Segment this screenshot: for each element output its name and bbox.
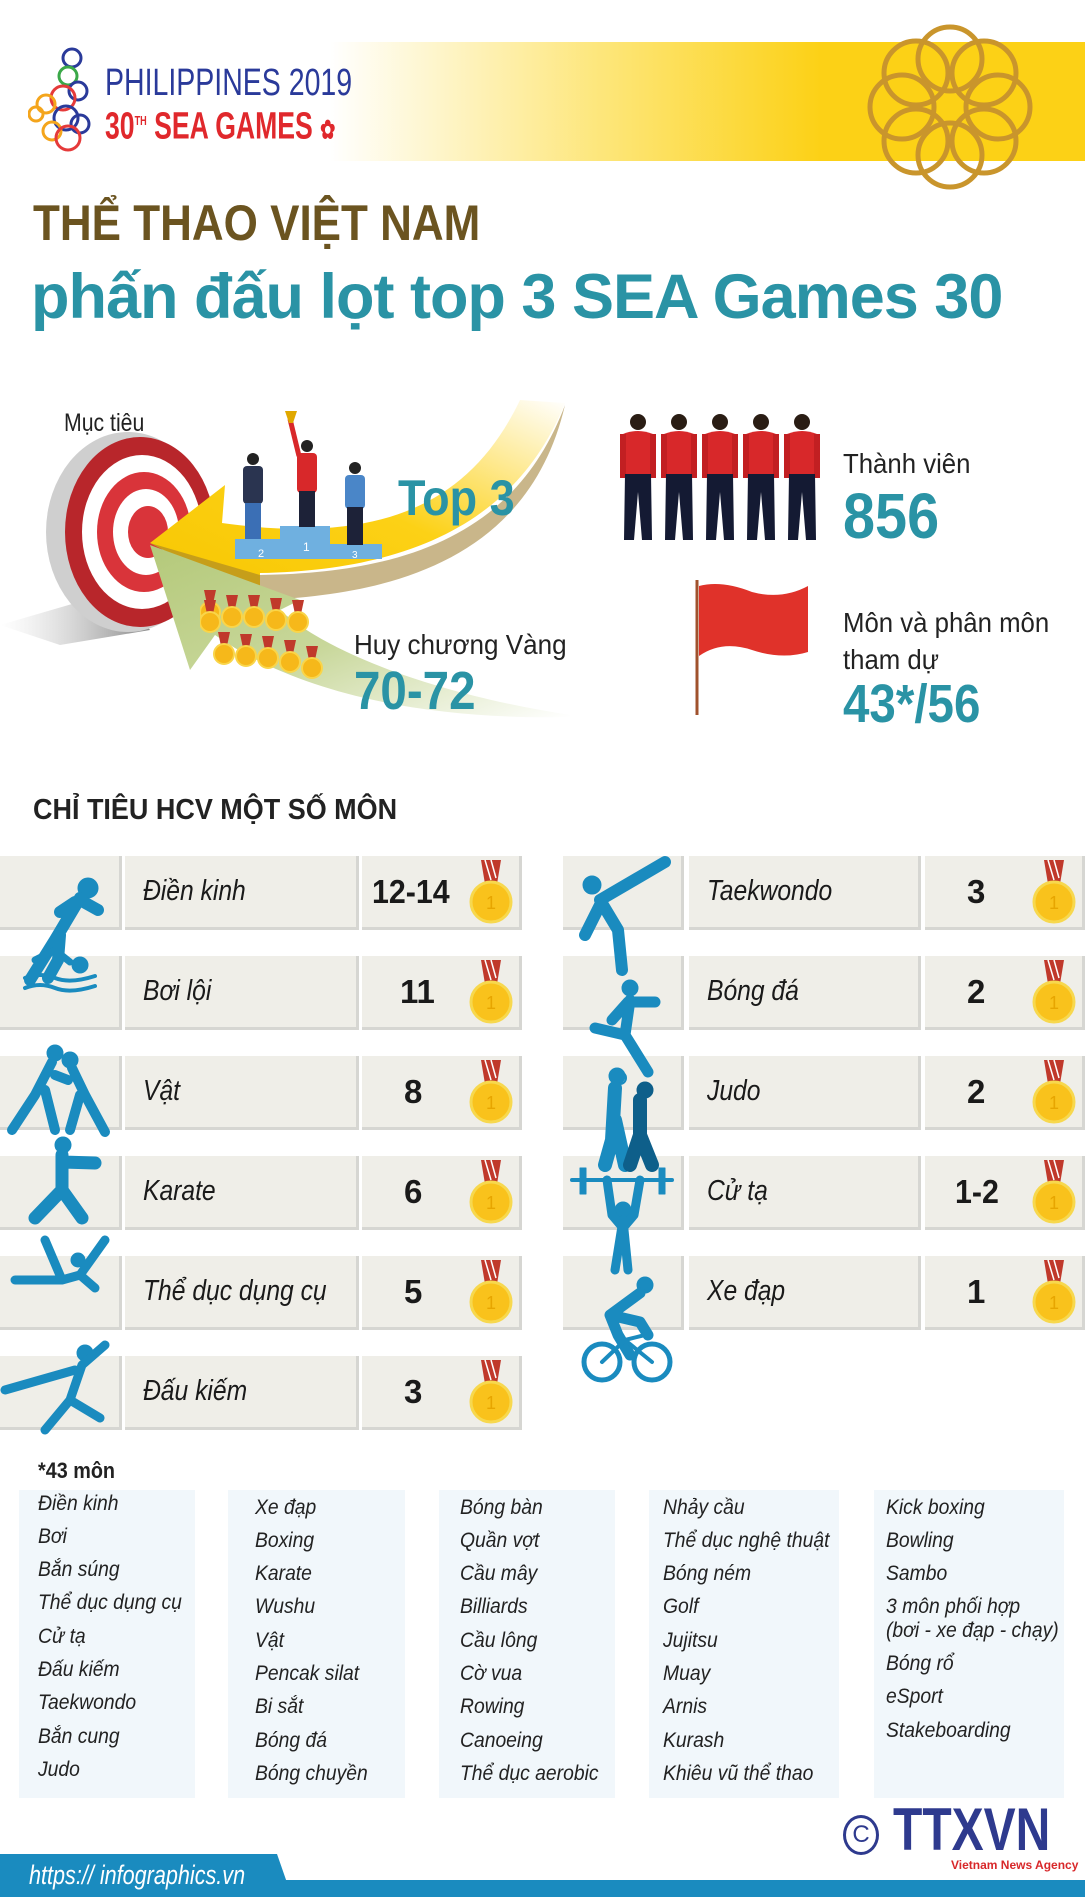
row: Điền kinh: Điền kinh: [143, 875, 246, 907]
list column 2: Bóng đá: [255, 1729, 327, 1752]
list column 4: Nhảy cầu: [663, 1496, 745, 1519]
list column 3: Billiards: [460, 1595, 528, 1618]
logo: SEA Games rings and text: 30TH SEA GAMES ✿: [105, 106, 335, 148]
logo: TTXVN: C: [852, 1821, 870, 1848]
row: Xe đạp: 1: [967, 1273, 985, 1310]
row: Vật: Vật: [143, 1075, 180, 1107]
list column 1: Thể dục dụng cụ: [38, 1591, 182, 1614]
gymnast: [15, 1240, 105, 1288]
row: Bóng đá: [563, 956, 1085, 1030]
list column 1: Judo: [38, 1758, 80, 1781]
footnote heading: *43 môn: *43 môn: [38, 1458, 115, 1483]
row: Thể dục dụng cụ: 5: [404, 1273, 422, 1310]
row: Đấu kiếm: 3: [404, 1373, 422, 1410]
cyclist: [584, 1277, 670, 1380]
label: Môn và phân môn: [843, 607, 1049, 638]
label: Thành viên: Thành viên: [843, 448, 970, 479]
podium with athletes: 1: [303, 540, 310, 554]
list column 5: Kick boxing: [886, 1496, 985, 1519]
label: Huy chương Vàng: Huy chương Vàng: [354, 629, 567, 660]
row: Thể dục dụng cụ: Thể dục dụng cụ: [143, 1275, 327, 1307]
row: Judo: Judo: [707, 1075, 760, 1107]
list column 1: Đấu kiếm: [38, 1658, 120, 1681]
row: Điền kinh: 12-14: [372, 873, 450, 910]
row: Cử tạ: 1-2: [955, 1173, 999, 1210]
list column 3: Rowing: [460, 1695, 524, 1718]
list column 4: Bóng ném: [663, 1562, 751, 1585]
list column 5: 3 môn phối hợp: [886, 1595, 1020, 1618]
logo: TTXVN: [843, 1796, 1078, 1872]
list column 2: Xe đạp: [255, 1496, 316, 1519]
icon: red flag: [696, 580, 808, 715]
row: Bóng đá: 2: [967, 973, 985, 1010]
list column 2: [228, 1490, 405, 1798]
label: tham dự: [843, 644, 939, 675]
list column 4: Khiêu vũ thể thao: [663, 1762, 813, 1785]
list column 4: Jujitsu: [663, 1629, 718, 1652]
row: Thể dục dụng cụ: [0, 1256, 522, 1330]
list column 5: Sambo: [886, 1562, 947, 1585]
list column 3: Cầu lông: [460, 1629, 537, 1652]
podium with athletes: 2: [258, 548, 264, 560]
row: Vật: 8: [404, 1073, 422, 1110]
podium with athletes: [235, 411, 382, 561]
row: Xe đạp: [563, 1256, 1085, 1330]
row: Bơi lội: [0, 956, 522, 1030]
row: Xe đạp: Xe đạp: [707, 1275, 785, 1307]
logo text: PHILIPPINES 2019: [105, 62, 352, 104]
label: Mục tiêu: Mục tiêu: [64, 409, 144, 437]
football: [595, 980, 655, 1084]
list column 1: [19, 1490, 195, 1798]
value: 43*/56: 43*/56: [843, 674, 980, 734]
fencer: [5, 1345, 105, 1430]
karate: [35, 1137, 95, 1218]
row: Taekwondo: [563, 856, 1085, 930]
table right column: [563, 856, 1085, 1330]
yellow arrow: [150, 400, 565, 600]
list column 1: Bơi: [38, 1525, 67, 1548]
panel: sports count: [696, 580, 1049, 734]
podium with athletes: 3: [352, 550, 358, 561]
row: Judo: 2: [967, 1073, 985, 1110]
list column 3: Canoeing: [460, 1729, 543, 1752]
label: [843, 607, 1049, 675]
panel: members: [620, 414, 970, 552]
list column 5: Stakeboarding: [886, 1719, 1011, 1742]
value: 70-72: 70-72: [354, 661, 476, 721]
list column 2: Wushu: [255, 1595, 315, 1618]
list column 4: Golf: [663, 1595, 698, 1618]
runner: [30, 878, 98, 980]
list column 4: Thể dục nghệ thuật: [663, 1529, 830, 1552]
row: Bóng đá: Bóng đá: [707, 975, 799, 1007]
value: 856: 856: [843, 480, 939, 552]
list column 4: Kurash: [663, 1729, 724, 1752]
icon: gold medals: [200, 590, 323, 679]
taekwondo: [583, 862, 665, 970]
list column 4: Muay: [663, 1662, 710, 1685]
list column 3: Thể dục aerobic: [460, 1762, 599, 1785]
list column 2: Karate: [255, 1562, 312, 1585]
list column 5: (bơi - xe đạp - chạy): [886, 1619, 1059, 1642]
logo: TTXVN: Vietnam News Agency: [951, 1858, 1078, 1872]
icons: sport silhouettes and medals: [0, 856, 1076, 1434]
footer bar with url: https:// infographics.vn: [29, 1860, 245, 1890]
row: Cử tạ: [563, 1156, 1085, 1230]
list column 1: Taekwondo: [38, 1691, 136, 1714]
list column 3: Cờ vua: [460, 1662, 522, 1685]
row: Karate: Karate: [143, 1175, 216, 1207]
list column 1: Bắn súng: [38, 1558, 120, 1581]
list column 1: Điền kinh: [38, 1492, 119, 1515]
list column 5: [874, 1490, 1064, 1798]
list column 3: [439, 1490, 615, 1798]
judo: [605, 1068, 653, 1165]
medals: [471, 860, 511, 922]
panel: goal target with arrows: [20, 400, 567, 721]
icon: colored rings: [28, 48, 90, 152]
list column 3: Bóng bàn: [460, 1496, 543, 1519]
list column 4: Arnis: [663, 1695, 707, 1718]
heading: chi tieu: CHỈ TIÊU HCV MỘT SỐ MÔN: [33, 794, 397, 826]
label: Top 3: Top 3: [398, 470, 515, 526]
list column 2: Pencak silat: [255, 1662, 359, 1685]
table left column: [0, 856, 522, 1430]
footer bar with url: [0, 1854, 1085, 1897]
header yellow band: [330, 42, 1085, 161]
row: Bơi lội: 11: [400, 973, 435, 1010]
list column 3: Quần vợt: [460, 1529, 539, 1552]
logo: SEA Games rings and text: [28, 48, 352, 152]
target: [20, 400, 565, 717]
row: Bơi lội: Bơi lội: [143, 975, 211, 1007]
list column 2: Vật: [255, 1629, 284, 1652]
list column 2: Boxing: [255, 1529, 314, 1552]
green arrow: [150, 545, 570, 717]
list column 1: Cử tạ: [38, 1625, 86, 1648]
wrestlers: [12, 1045, 105, 1132]
title line 2: phấn đấu lọt top 3 SEA Games 30: [31, 262, 1002, 332]
list column 4: [649, 1490, 839, 1798]
list column 1: Bắn cung: [38, 1725, 120, 1748]
title line 1: THỂ THAO VIỆT NAM: [33, 195, 480, 251]
logo: TTXVN: TTXVN: [893, 1796, 1050, 1863]
icon: gold flower emblem: [868, 24, 1032, 190]
row: Karate: [0, 1156, 522, 1230]
row: Taekwondo: Taekwondo: [707, 875, 832, 907]
row: Cử tạ: Cử tạ: [707, 1175, 768, 1207]
row: Karate: 6: [404, 1173, 422, 1210]
row: Vật: [0, 1056, 522, 1130]
row: Điền kinh: [0, 856, 522, 930]
weightlifter: [572, 1168, 672, 1270]
list column 5: eSport: [886, 1685, 943, 1708]
row: Đấu kiếm: [0, 1356, 522, 1430]
list column 3: Cầu mây: [460, 1562, 537, 1585]
list column 2: Bi sắt: [255, 1695, 303, 1718]
list column 2: Bóng chuyền: [255, 1762, 368, 1785]
swimmer: [25, 950, 95, 991]
list column 5: Bóng rổ: [886, 1652, 954, 1675]
list column 5: Bowling: [886, 1529, 954, 1552]
icon: five athletes: [620, 414, 820, 540]
row: Judo: [563, 1056, 1085, 1130]
row: Đấu kiếm: Đấu kiếm: [143, 1375, 247, 1407]
row: Taekwondo: 3: [967, 873, 985, 910]
